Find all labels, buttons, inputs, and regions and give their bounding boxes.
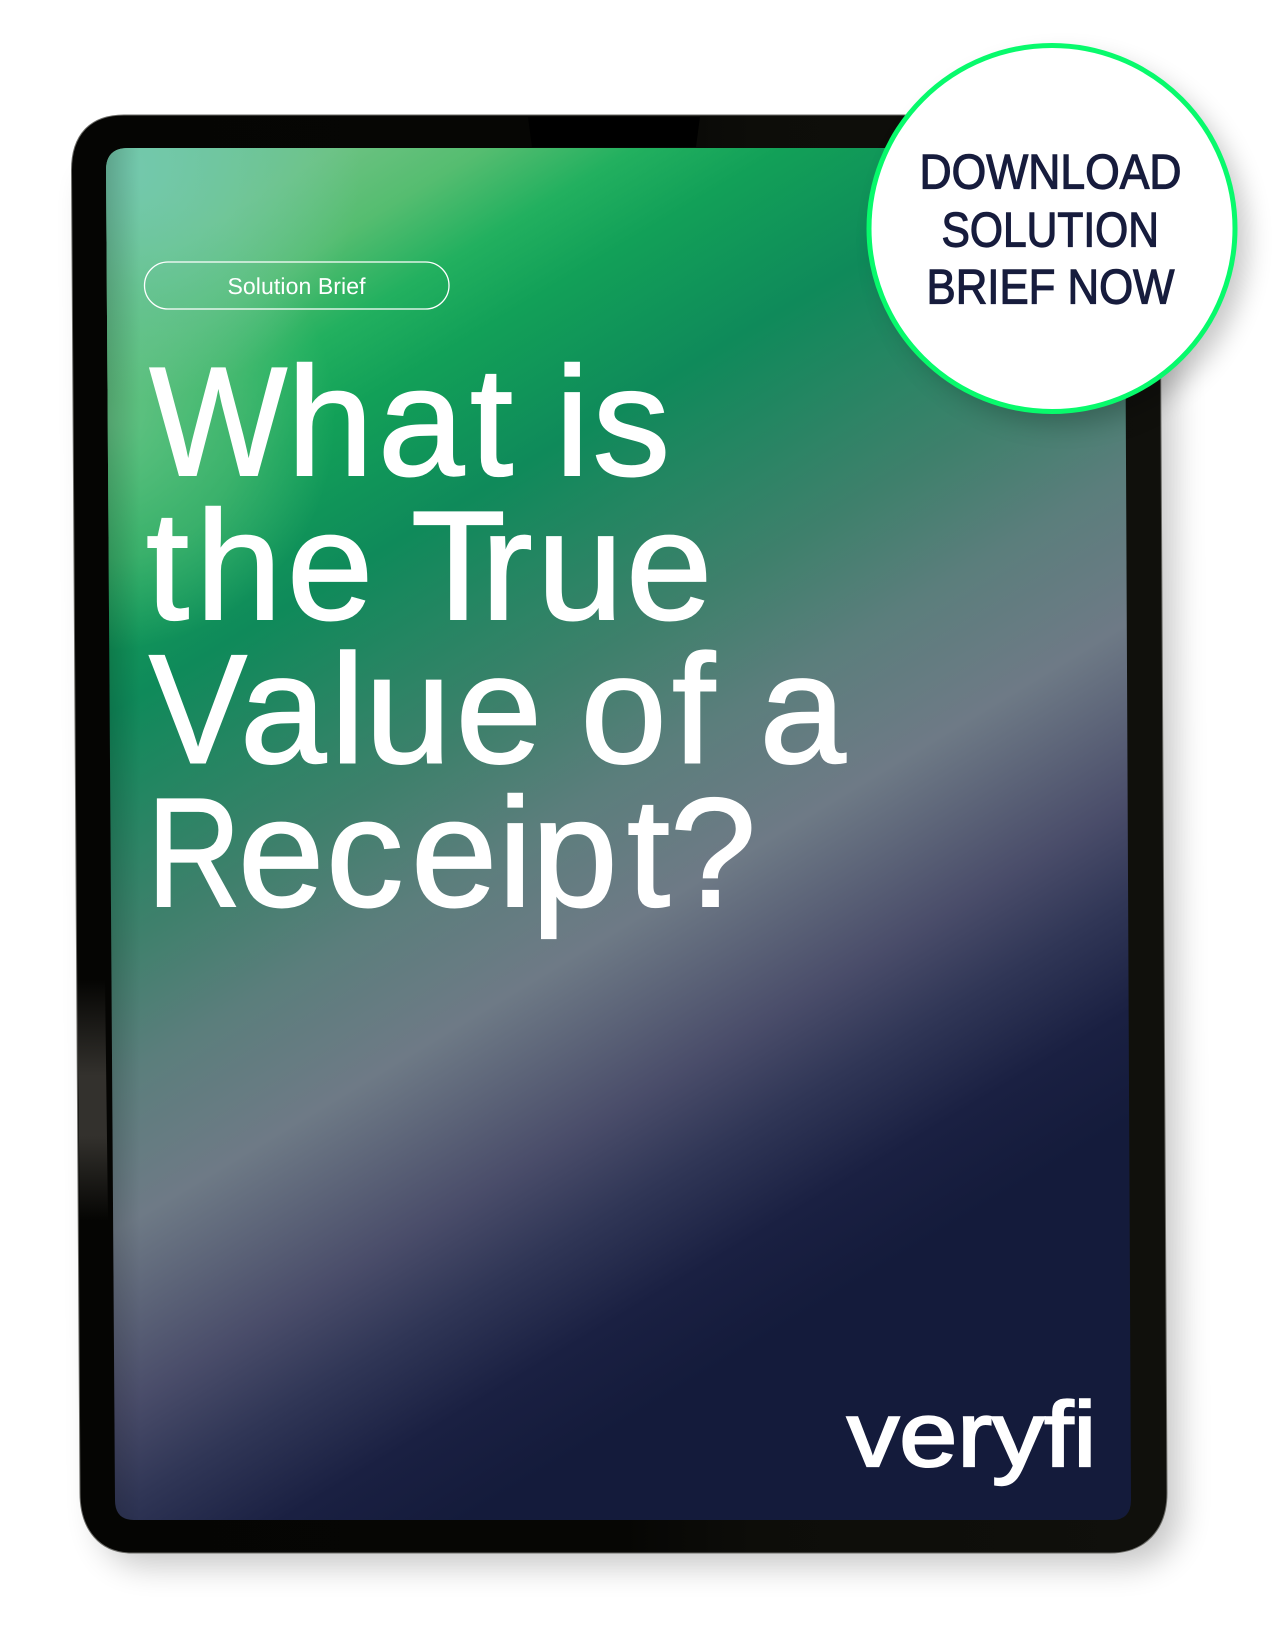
title: alue of a (240, 622, 846, 796)
title: eceipt? (238, 766, 756, 939)
download badge (869, 46, 1247, 424)
badge text: SOLUTION (942, 204, 1159, 258)
title (146, 335, 846, 939)
tablet device (72, 115, 1180, 1566)
tablet bezel (72, 115, 1167, 1553)
title: hat is (287, 335, 670, 508)
tablet screen (100, 140, 1140, 1525)
badge text: DOWNLOAD (920, 146, 1182, 200)
tag pill: Solution Brief: Solution Brief (228, 273, 366, 299)
badge text (920, 146, 1182, 315)
title: V (149, 622, 247, 796)
tag pill: Solution Brief (144, 262, 449, 309)
title: the True (146, 479, 712, 652)
bezel reflection (77, 980, 108, 1220)
title: R (147, 766, 241, 939)
title: W (150, 335, 287, 508)
camera notch (528, 117, 700, 147)
logo: veryfi: veryfi (847, 1384, 1096, 1486)
badge text: BRIEF NOW (926, 261, 1175, 315)
